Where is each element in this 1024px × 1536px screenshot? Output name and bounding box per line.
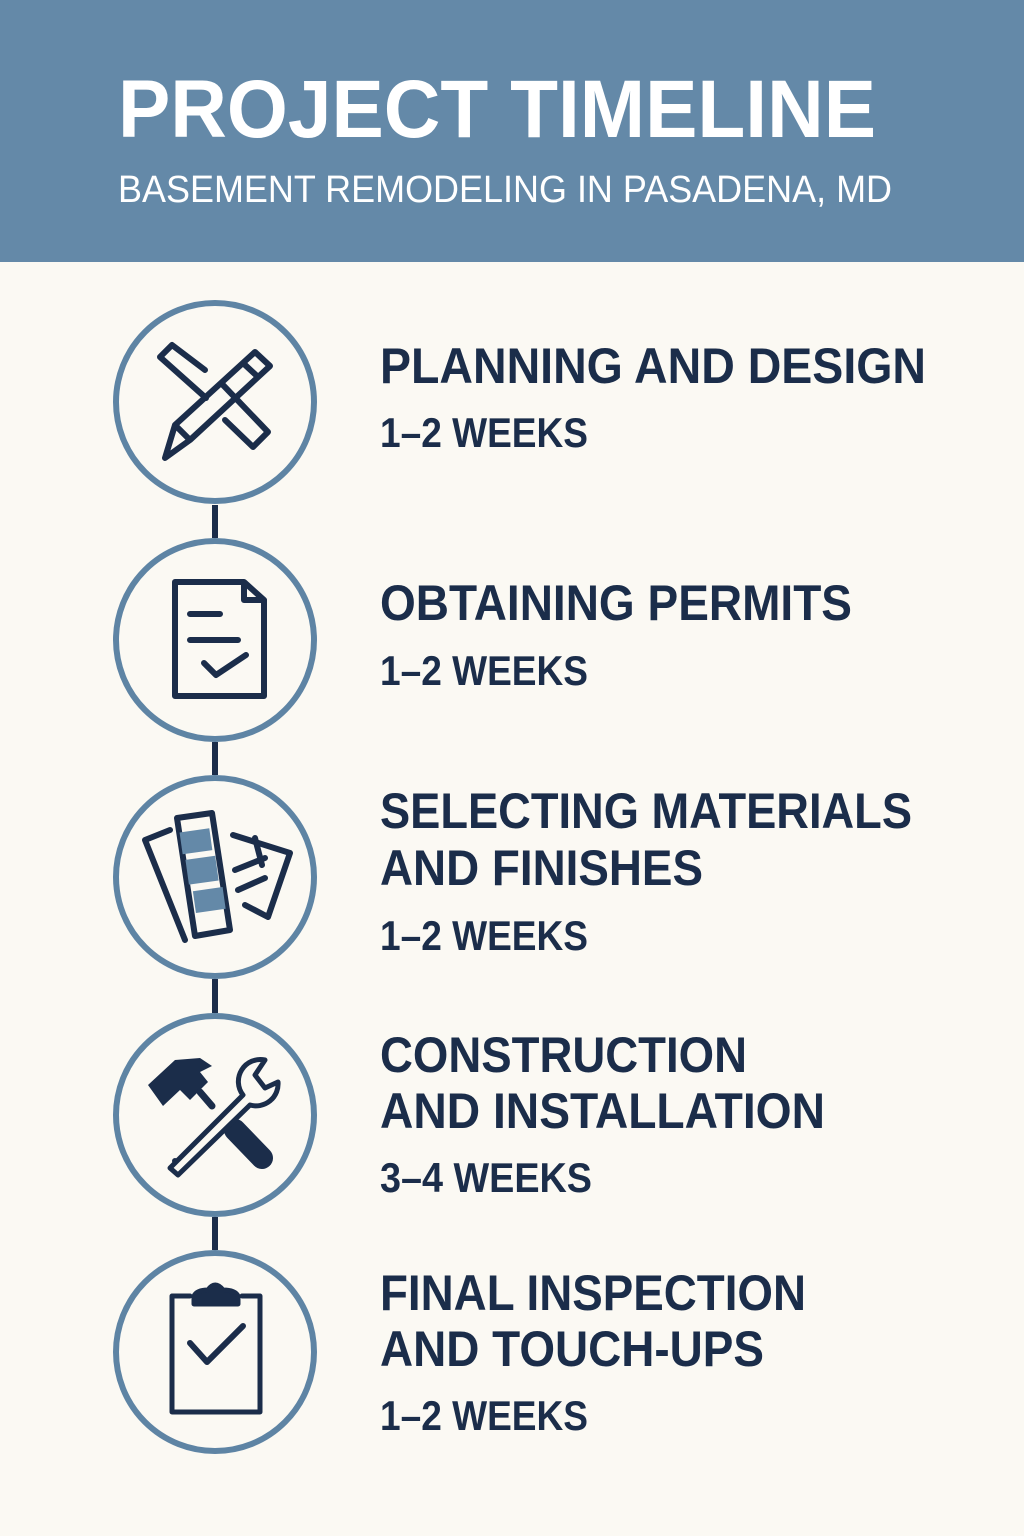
step 5: final inspection: AND TOUCH-UPS	[380, 1321, 764, 1377]
duration: 1–2 WEEKS	[380, 409, 588, 456]
icon: document with check	[116, 541, 314, 739]
heading: FINAL INSPECTION	[380, 1265, 806, 1321]
icon: hammer and wrench	[116, 1016, 314, 1214]
step 1: planning and design	[116, 303, 926, 501]
step 3: selecting materials: AND FINISHES	[380, 840, 703, 896]
step 3: selecting materials	[116, 778, 912, 976]
heading: PLANNING AND DESIGN	[380, 338, 926, 394]
timeline connector	[212, 505, 218, 1250]
step 4: construction	[116, 1016, 825, 1214]
heading: OBTAINING PERMITS	[380, 575, 852, 631]
step 5: final inspection	[116, 1253, 806, 1451]
subtitle: BASEMENT REMODELING IN PASADENA, MD	[118, 169, 892, 211]
duration: 1–2 WEEKS	[380, 912, 588, 959]
step 2: obtaining permits	[116, 541, 852, 739]
heading: CONSTRUCTION	[380, 1027, 747, 1083]
duration: 3–4 WEEKS	[380, 1154, 592, 1201]
step 4: construction: AND INSTALLATION	[380, 1083, 825, 1139]
icon: clipboard with check	[116, 1253, 314, 1451]
icon: swatches	[116, 778, 314, 976]
heading: SELECTING MATERIALS	[380, 783, 912, 839]
duration: 1–2 WEEKS	[380, 1392, 588, 1439]
header banner	[0, 0, 1024, 262]
icon: pencil and ruler	[116, 303, 314, 501]
title: PROJECT TIMELINE	[118, 64, 876, 155]
duration: 1–2 WEEKS	[380, 647, 588, 694]
